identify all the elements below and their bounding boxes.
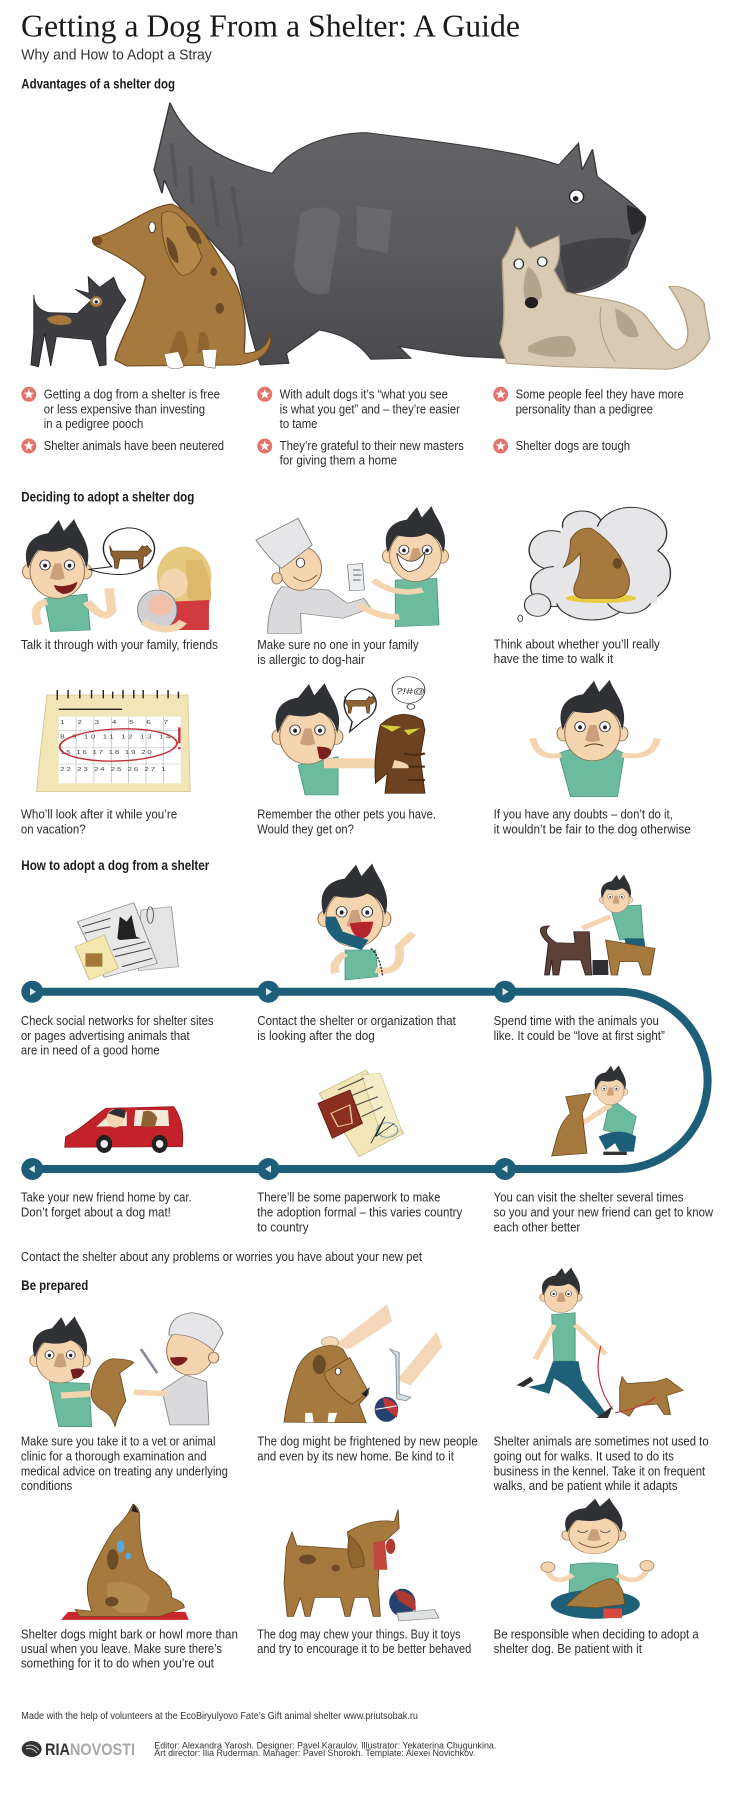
caption: social networks: Check social networks for shelter sites <box>21 1013 214 1028</box>
panel: be prepared illustrations <box>30 1267 683 1621</box>
icon: frightened dog <box>284 1304 442 1423</box>
panel: deciding illustrations <box>23 506 670 797</box>
caption: chew: and try to encourage it to be better behaved <box>257 1641 471 1656</box>
icon: boy petting dogs <box>540 875 655 975</box>
panel: be prepared captions <box>21 1434 709 1671</box>
bullet: grateful: for giving them a home <box>280 453 397 468</box>
caption: other pets: Would they get on? <box>257 821 354 836</box>
caption: contact the shelter: Contact the shelter or organization that <box>257 1013 456 1028</box>
bullet: grateful <box>257 438 464 468</box>
caption: walks <box>493 1434 709 1493</box>
caption: social networks: or pages advertising animals that <box>21 1028 190 1043</box>
caption: walks: walks, and be patient while it adapts <box>493 1478 678 1493</box>
credits: Art director: Ilia Ruderman. Manager: Pavel Shorokh. Template: Alexei Novichkov. <box>154 1748 475 1759</box>
caption: other pets <box>257 806 436 836</box>
timeline <box>21 981 708 1180</box>
caption: walks: Shelter animals are sometimes not used to <box>494 1434 709 1449</box>
caption: time to walk: have the time to walk it <box>494 651 613 666</box>
icon: vet visit <box>30 1313 223 1427</box>
icon: boy hugging dog <box>552 1065 636 1156</box>
caption: time to walk: Think about whether you’ll really <box>494 636 660 652</box>
caption: bark or howl <box>21 1626 238 1671</box>
icon: calendar: 1 2 3 4 5 6 7 <box>60 720 168 726</box>
caption: doubts <box>494 806 691 836</box>
caption: bark or howl: Shelter dogs might bark or howl more than <box>21 1626 238 1641</box>
title: Getting a Dog From a Shelter: A Guide <box>21 8 520 44</box>
icon: dog chewing scarf <box>284 1509 439 1621</box>
bullet: what you see: to tame <box>280 416 318 431</box>
bullet: personality: personality than a pedigree <box>516 401 653 416</box>
icon: boy with cat: ?!#@ <box>396 687 425 696</box>
caption: vacation: on vacation? <box>21 821 86 836</box>
caption: be responsible: Be responsible when deciding to adopt a <box>494 1626 699 1641</box>
timeline node 6 <box>21 1158 43 1180</box>
caption: visit several times <box>494 1190 714 1235</box>
caption: frightened <box>257 1434 478 1463</box>
bullet: tough: Shelter dogs are tough <box>516 438 630 453</box>
bullet: personality: Some people feel they have more <box>516 386 684 401</box>
caption: walks: business in the kennel. Take it on frequent <box>494 1463 706 1478</box>
panel: timeline illustrations <box>65 864 655 1157</box>
caption: visit several times: You can visit the shelter several times <box>494 1190 684 1205</box>
small black dog <box>31 277 126 367</box>
bullet: free or less expensive: or less expensive than investing <box>44 401 205 416</box>
icon: calendar <box>37 690 190 792</box>
icon: boy on the phone <box>318 864 413 980</box>
caption: be responsible <box>494 1626 699 1656</box>
caption: allergic: Make sure no one in your family <box>257 637 419 652</box>
caption: paperwork: the adoption formal – this varies country <box>257 1205 463 1220</box>
timeline node 1 <box>21 981 43 1003</box>
caption: visit several times: each other better <box>494 1220 581 1235</box>
icon: doctor and allergic boy <box>256 506 449 633</box>
credits <box>154 1741 496 1759</box>
caption: vet <box>21 1434 228 1493</box>
icon: calendar: 8 9 10 11 12 13 14 <box>60 734 171 740</box>
timeline node 2 <box>258 981 280 1003</box>
icon: meditating boy <box>541 1498 654 1619</box>
caption: bark or howl: usual when you leave. Make sure there’s <box>21 1641 222 1656</box>
caption: vacation: Who’ll look after it while you’re <box>21 806 177 821</box>
bullet: free or less expensive: Getting a dog from a shelter is free <box>44 386 220 401</box>
caption: doubts: If you have any doubts – don’t do it, <box>494 806 673 821</box>
caption: other pets: Remember the other pets you have. <box>257 806 436 821</box>
icon: passport and documents <box>318 1070 404 1157</box>
timeline node 5 <box>258 1158 280 1180</box>
panel: advantages list <box>21 386 684 468</box>
caption: doubts: it wouldn’t be fair to the dog otherwise <box>494 821 691 836</box>
icon: boy with cat <box>272 677 425 795</box>
icon: calendar: 22 23 24 25 26 27 1 <box>60 767 166 773</box>
caption: frightened: and even by its new home. Be kind to it <box>257 1448 454 1463</box>
caption: vet: Make sure you take it to a vet or animal <box>21 1434 216 1449</box>
timeline node 3 <box>494 981 516 1003</box>
heading: how to adopt: How to adopt a dog from a shelter <box>21 858 210 873</box>
caption: chew <box>257 1626 471 1656</box>
credits: Editor: Alexandra Yarosh. Designer: Pavel Karaulov. Illustrator: Yekaterina Chugunkina. <box>154 1741 496 1752</box>
caption: spend time: like. It could be “love at first sight” <box>494 1028 665 1043</box>
note: contact the shelter about problems: Contact the shelter about any problems or worries you have about your new pet <box>21 1249 422 1264</box>
caption: take home: Don’t forget about a dog mat! <box>21 1205 171 1220</box>
caption: be responsible: shelter dog. Be patient with it <box>494 1641 642 1656</box>
caption: chew: The dog may chew your things. Buy it toys <box>257 1626 461 1641</box>
caption: paperwork <box>257 1190 463 1235</box>
caption: vet: clinic for a thorough examination and <box>21 1448 207 1463</box>
bullet: what you see: is what you get” and – they’re easier <box>280 401 460 416</box>
caption: vet: conditions <box>21 1478 73 1493</box>
icon: papers <box>75 903 178 980</box>
bullet: neutered: Shelter animals have been neutered <box>44 438 224 453</box>
bullet: personality <box>493 386 684 416</box>
caption: time to walk <box>494 636 660 666</box>
icon: calendar: 15 16 17 18 19 20 <box>60 750 152 756</box>
icon: walking man and dog <box>516 1267 683 1418</box>
cream dog <box>500 227 710 369</box>
caption: allergic: is allergic to dog-hair <box>257 652 365 667</box>
icon: red car <box>65 1107 183 1153</box>
caption: bark or howl: something for it to do when you’re out <box>21 1656 214 1671</box>
subtitle: Why and How to Adopt a Stray <box>21 46 212 63</box>
heading: be prepared: Be prepared <box>21 1278 88 1293</box>
icon: boy shrugging <box>533 680 657 797</box>
big grey dog <box>154 103 646 365</box>
caption: vacation <box>21 806 177 836</box>
icon: howling dog on mat <box>61 1504 189 1620</box>
caption: frightened: The dog might be frightened by new people <box>257 1434 478 1449</box>
bullet: what you see: With adult dogs it’s “what you see <box>280 386 448 401</box>
panel: deciding captions <box>21 636 691 836</box>
caption: paperwork: to country <box>257 1220 309 1235</box>
caption: walks: going out for walks. It used to do its <box>494 1448 674 1463</box>
panel: timeline captions <box>21 1013 714 1264</box>
bullet: free or less expensive: in a pedigree pooch <box>44 416 143 431</box>
caption: talk it through: Talk it through with your family, friends <box>21 637 218 652</box>
heading: advantages: Advantages of a shelter dog <box>21 77 175 92</box>
brown sitting dog <box>93 204 271 369</box>
bullet: grateful: They’re grateful to their new masters <box>280 438 464 453</box>
caption: social networks <box>21 1013 214 1058</box>
bullet: what you see <box>257 386 460 431</box>
caption: take home: Take your new friend home by car. <box>21 1190 192 1205</box>
icon: thought cloud with dog <box>518 507 670 622</box>
caption: allergic <box>257 637 419 667</box>
footer note: Made with the help of volunteers at the EcoBiryulyovo Fate’s Gift animal shelter www.priutsobak.ru <box>21 1711 418 1722</box>
timeline node 4 <box>494 1158 516 1180</box>
illustration: four dogs <box>31 103 710 369</box>
icon: boy talking to family <box>23 519 211 632</box>
caption: contact the shelter <box>257 1013 456 1043</box>
caption: social networks: are in need of a good home <box>21 1043 160 1058</box>
caption: take home <box>21 1190 192 1220</box>
caption: visit several times: so you and your new friend can get to know <box>494 1205 714 1220</box>
caption: contact the shelter: is looking after the dog <box>257 1028 375 1043</box>
caption: spend time: Spend time with the animals you <box>494 1013 659 1028</box>
caption: spend time <box>494 1013 665 1043</box>
bullet: free or less expensive <box>21 386 220 431</box>
logo: RIA Novosti: RIANOVOSTI <box>45 1741 135 1759</box>
caption: vet: medical advice on treating any underlying <box>21 1463 228 1478</box>
heading: deciding: Deciding to adopt a shelter dog <box>21 490 194 505</box>
caption: paperwork: There’ll be some paperwork to make <box>257 1190 440 1205</box>
